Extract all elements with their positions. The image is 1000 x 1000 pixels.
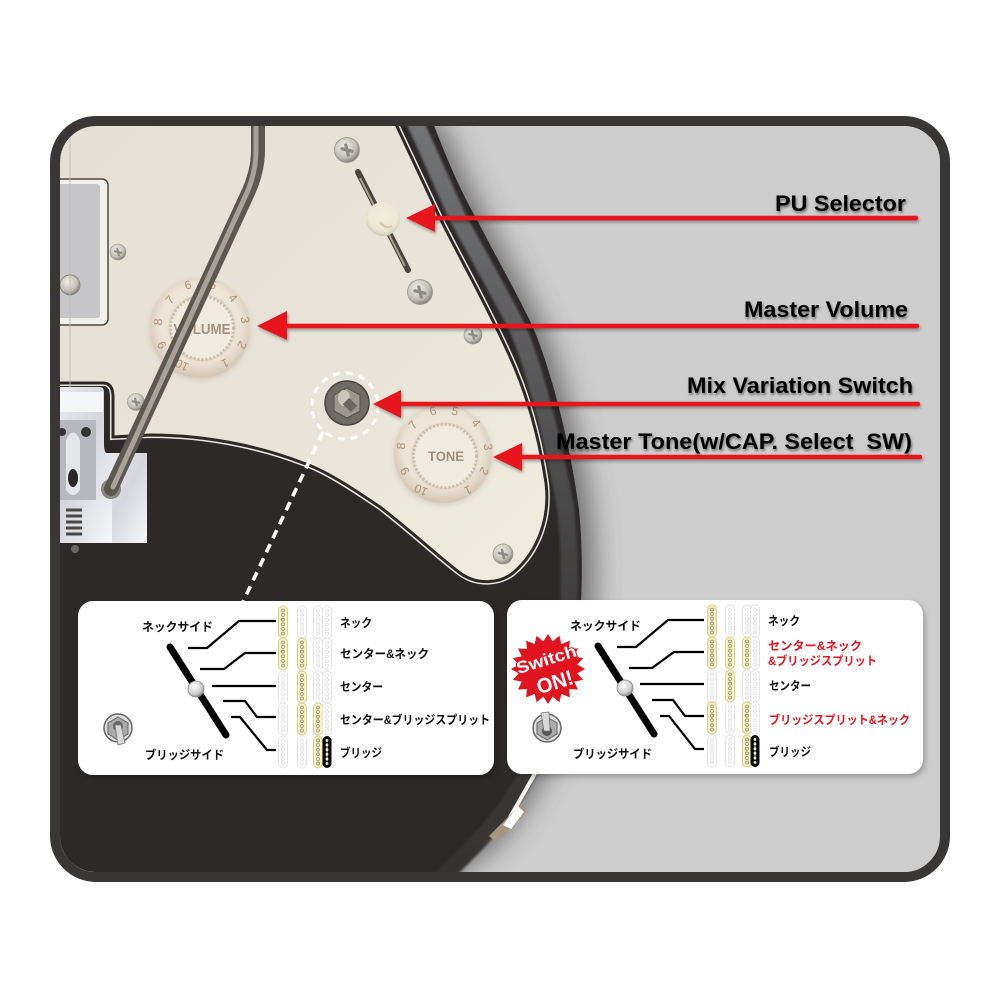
body shadow: [50, 120, 594, 890]
volume knob: 9: [154, 338, 170, 351]
pickup selector slot: [358, 172, 408, 270]
tone knob: 8: [394, 442, 408, 450]
slot highlight: [360, 178, 405, 266]
neck pickup: [60, 178, 109, 326]
arrow: master volume: [257, 311, 919, 340]
dashed leader line: [242, 432, 323, 604]
neck side label: ネックサイド: [142, 620, 213, 634]
position labels: ブリッジ: [769, 744, 811, 759]
position labels: ブリッジスプリット&ネック: [769, 712, 910, 727]
bridge side label: ブリッジサイド: [145, 747, 224, 762]
icon: toggle down: [104, 714, 132, 745]
position labels: センター&ネック: [340, 647, 429, 661]
position labels: センター&ネック: [768, 639, 862, 653]
pickup grid: [708, 605, 760, 767]
position lines: [188, 621, 276, 750]
tone knob: 5: [450, 403, 460, 419]
tone knob: 9: [397, 464, 413, 477]
volume knob: [150, 277, 252, 380]
volume knob: VOLUME: [174, 321, 230, 338]
volume knob: 3: [238, 316, 252, 324]
tone knob: 3: [481, 443, 495, 451]
infographic canvas: [50, 116, 950, 882]
bridge: [60, 387, 147, 553]
tone knob: 4: [468, 416, 484, 430]
position labels: センター&ブリッジスプリット: [340, 712, 490, 727]
position labels: ブリッジ: [340, 745, 382, 760]
arrow: mix variation switch: [373, 390, 920, 418]
volume knob: 2: [234, 339, 250, 352]
label: PU Selector: PU Selector: [775, 191, 906, 216]
badge: Switch ON: Switch: [514, 642, 579, 678]
tone knob: TONE: [428, 448, 464, 464]
pickup grid: [278, 606, 332, 768]
neck side label: ネックサイド: [570, 619, 641, 633]
label: Master Tone: Master Tone(w/CAP. Select SW): [556, 429, 912, 454]
panel: switch off wiring: [78, 601, 494, 775]
string: [70, 137, 71, 387]
arrow: master tone: [493, 443, 922, 471]
tone knob: 10: [412, 481, 430, 499]
arrow: PU selector: [406, 204, 918, 232]
screws: [110, 138, 513, 564]
position lines: [617, 620, 704, 749]
pickguard: [50, 120, 547, 582]
volume knob: 5: [208, 277, 218, 293]
position labels: [768, 614, 910, 759]
position labels: センター: [340, 680, 383, 694]
tone knob: 7: [405, 418, 421, 432]
position labels: ネック: [340, 616, 372, 630]
tremolo arm: [101, 120, 258, 499]
panel: switch on wiring: [507, 600, 923, 774]
icon: toggle up: [533, 712, 561, 742]
volume knob: 4: [225, 291, 241, 305]
selector lever: [598, 646, 654, 734]
bridge side label: ブリッジサイド: [573, 746, 652, 761]
tone knob: 1: [462, 482, 474, 498]
label: Mix Variation Switch: Mix Variation Switch: [687, 373, 913, 398]
tone knob: 6: [428, 403, 438, 419]
badge: Switch ON: [511, 634, 585, 704]
body edge band: [414, 120, 569, 880]
volume knob: 10: [173, 356, 191, 374]
volume knob: 6: [183, 277, 193, 293]
selector lever: [170, 647, 226, 735]
position labels: [340, 616, 490, 760]
position labels: &ブリッジスプリット: [768, 653, 877, 668]
label: Master Volume: Master Volume: [744, 297, 908, 322]
tone knob: [394, 403, 495, 505]
mix variation toggle switch: [325, 381, 369, 425]
guitar photo area: [50, 120, 940, 890]
volume knob: 7: [162, 293, 178, 307]
dashed highlight circle: [312, 373, 378, 439]
volume knob: 8: [151, 318, 165, 326]
guitar body: [50, 120, 582, 880]
position labels: ネック: [768, 614, 800, 628]
badge: Switch ON: ON!: [534, 666, 576, 699]
pickup selector tip: [366, 202, 400, 236]
output jack trim: [489, 770, 537, 842]
tone knob: 2: [476, 465, 492, 478]
volume knob: 1: [219, 355, 231, 371]
frame: [55, 121, 945, 877]
position labels: センター: [769, 679, 811, 693]
